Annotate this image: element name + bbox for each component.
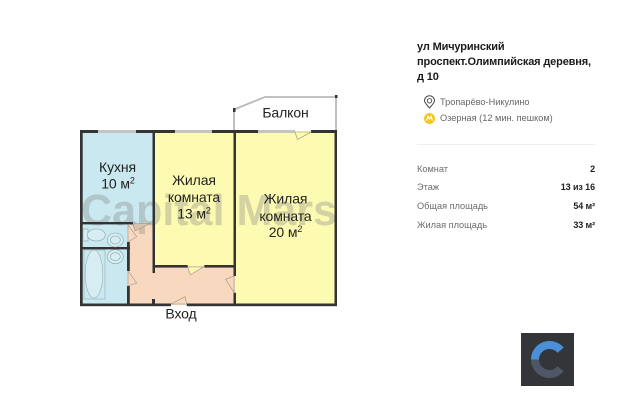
room labels: 2 [206, 206, 211, 216]
stat: floor value: 13 из 16 [561, 182, 595, 192]
room: hallway [129, 224, 235, 305]
district: Тропарёво-Никулино [440, 97, 530, 107]
room labels: Жилая [264, 190, 307, 206]
sinks [107, 233, 123, 264]
stat: rooms value: 2 [590, 164, 595, 174]
icon: location pin [424, 95, 435, 109]
address heading [417, 41, 591, 83]
stat: rooms label: Комнат [417, 164, 448, 174]
room labels [99, 104, 312, 322]
room labels: комната [259, 208, 312, 224]
logo [521, 333, 574, 386]
address heading: проспект.Олимпийская деревня, [417, 56, 591, 68]
room: bathroom [82, 249, 129, 305]
room labels: Жилая [172, 172, 216, 188]
room: kitchen [82, 131, 154, 224]
windows [98, 130, 295, 133]
room labels: комната [168, 189, 220, 205]
toilet fixture [83, 229, 105, 241]
kitchen door [133, 223, 151, 231]
balcony railing [234, 97, 336, 130]
room: toilet [82, 224, 129, 249]
stat: total area value: 54 м² [573, 201, 595, 211]
bathtub [84, 250, 105, 299]
room labels: 2 [130, 176, 135, 186]
room: living room 13 [154, 131, 235, 267]
room labels: 10 м [101, 176, 130, 192]
watermark: Capital Mars [81, 186, 337, 235]
room labels: 20 м [269, 224, 297, 240]
walls [80, 130, 337, 306]
stat: living area value: 33 м² [573, 220, 595, 230]
balcony posts [233, 95, 338, 112]
room labels: 2 [297, 224, 302, 234]
icon: metro [424, 113, 435, 124]
doors [128, 132, 311, 304]
room: living room 20 [235, 131, 336, 305]
address heading: ул Мичуринский [417, 41, 504, 53]
room labels: Кухня [99, 159, 136, 175]
stat: total area label: Общая площадь [417, 201, 488, 211]
room labels: Вход [165, 306, 197, 322]
metro station: Озерная (12 мин. пешком) [440, 113, 553, 123]
room labels: 13 м [177, 206, 206, 222]
address heading: д 10 [417, 71, 439, 83]
room labels: Балкон [262, 104, 309, 120]
stat: living area label: Жилая площадь [417, 220, 487, 230]
stat: floor label: Этаж [417, 182, 439, 192]
divider [417, 144, 595, 145]
